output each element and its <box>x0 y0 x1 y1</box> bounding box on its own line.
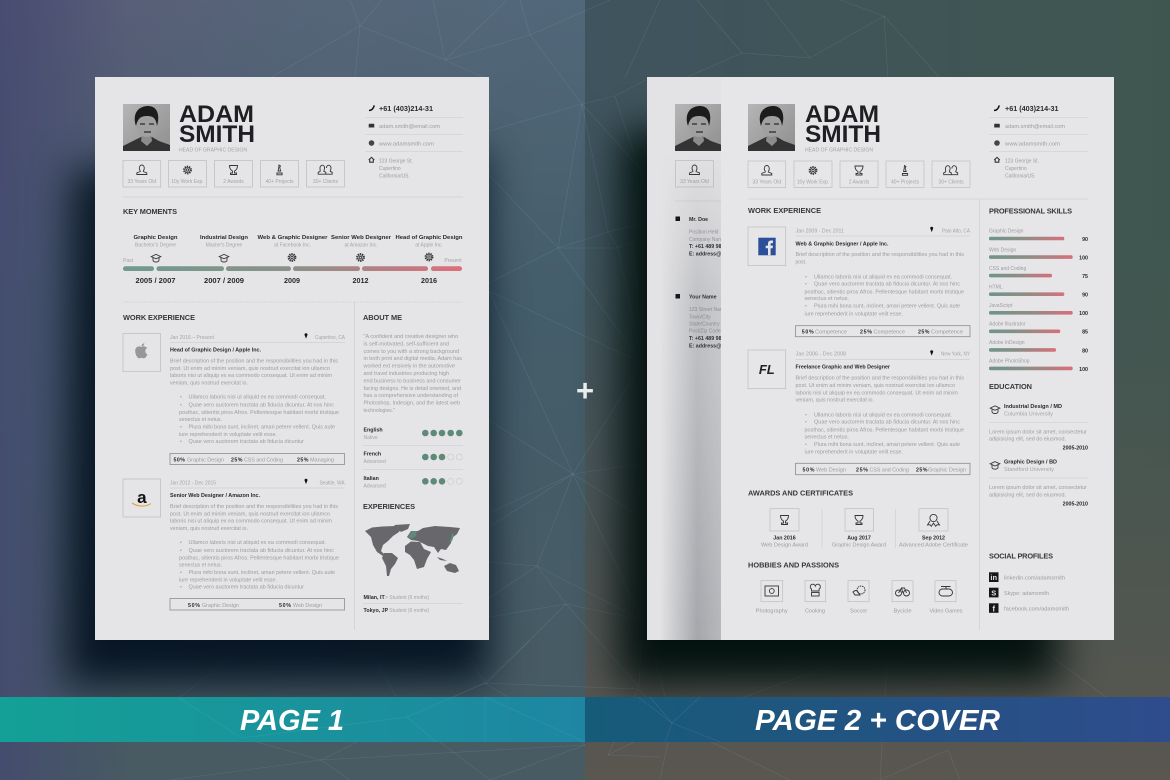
job: Facebook: • <box>805 275 807 281</box>
education: Lorem ipsum dolor sit amet, consectetur <box>989 429 1087 435</box>
education: Columbia University <box>1004 411 1054 417</box>
professional skills: 90 <box>1082 293 1088 299</box>
key moments timeline: Bachelor's Degree <box>135 242 176 248</box>
icon: camera <box>765 586 778 596</box>
job: Apple: Jan 2016 – Present <box>170 335 215 341</box>
professional skills: 90 <box>1082 237 1088 243</box>
contact details: +61 (403)214-31 <box>379 104 433 113</box>
hobbies and passions: Video Games <box>930 609 963 615</box>
contact details <box>365 104 463 179</box>
stat boxes: 40+ Projects <box>891 180 919 186</box>
job: Amazon: • <box>180 548 182 554</box>
icon: soccer ball <box>853 586 865 595</box>
job: Freelance: Freelance Graphic and Web Designer <box>796 365 890 371</box>
label: page 1: PAGE 1 <box>240 705 344 737</box>
about me: technologies." <box>364 408 395 414</box>
job: Freelance: 50% <box>802 467 815 473</box>
icon: apple logo <box>135 343 147 358</box>
job: Amazon: Senior Web Designer / Amazon Inc. <box>170 493 261 499</box>
cover reference 1 <box>676 216 721 256</box>
cover page behind page 2: 33 Years Old <box>680 179 709 185</box>
cover reference 2: State/Country <box>689 322 720 328</box>
about me: end business to business and consumer <box>364 378 461 384</box>
experiences: > Student (6 moths) <box>385 595 429 601</box>
key moments timeline: 2007 / 2009 <box>204 276 244 285</box>
job: Amazon: 50% <box>188 603 200 609</box>
key moments timeline: Head of Graphic Design <box>396 235 462 241</box>
contact details: Cupertino <box>1005 166 1027 172</box>
social profiles: in <box>990 573 997 582</box>
job: Facebook: iure reprehenderit in voluptate velit esse. <box>804 311 903 317</box>
key moments timeline: Master's Degree <box>206 242 242 248</box>
job: Facebook: • <box>805 281 807 287</box>
icon: amazon logo: a <box>137 488 147 507</box>
cover reference 2: Post/Zip Code <box>689 329 721 335</box>
job: Freelance: Plura mihi bona sunt, inclinet, amari petere vellent. Quis aute <box>814 442 960 448</box>
professional skills: Graphic Design <box>989 229 1024 235</box>
contact details: 123 George St. <box>1005 159 1039 165</box>
job: Apple: iure reprehenderit in voluptate velit esse. <box>179 432 277 438</box>
cover reference 1: E: address@mail.com <box>689 252 745 258</box>
education: Industrial Design / MD <box>1004 404 1062 410</box>
job: Apple: Graphic Design <box>187 458 224 464</box>
cover page behind page 2 <box>647 77 721 640</box>
work experience heading: WORK EXPERIENCE <box>123 313 195 322</box>
job: Amazon: • <box>180 570 182 576</box>
social profiles: Skype: adamsmith <box>1004 591 1049 597</box>
professional skills: 100 <box>1079 311 1088 317</box>
job: Apple: • <box>180 394 182 400</box>
hobbies and passions <box>748 561 963 615</box>
awards and certificates: Advanced Adobe Certificate <box>899 543 968 549</box>
icon: FL logo: FL <box>759 362 775 377</box>
job: Amazon: posthac, sitientis piros Afros. Pellentesque habitant morbi tristique <box>179 556 339 562</box>
job: Freelance: senectus et netus. <box>804 434 849 440</box>
job: Facebook: Competence <box>931 329 963 335</box>
key moments heading: KEY MOMENTS <box>123 207 177 216</box>
job: Freelance: iure reprehenderit in voluptate velit esse. <box>804 449 903 455</box>
stat boxes <box>123 160 344 187</box>
job: Freelance: Brief description of the position and the responsibilities you had in this <box>796 376 965 382</box>
job: Freelance: • <box>805 442 807 448</box>
social profiles: SOCIAL PROFILES <box>989 551 1053 560</box>
job: Apple: Cupertino, CA <box>315 335 346 341</box>
job: Apple: Quae vero auctorem tractata ab fiducia dicuntur. At nos hinc <box>188 402 335 408</box>
job: Apple: • <box>180 424 182 430</box>
professional skills: Adobe InDesign <box>989 340 1025 346</box>
hobbies and passions: HOBBIES AND PASSIONS <box>748 561 839 570</box>
job: Freelance: CSS and Coding <box>870 467 909 473</box>
hobbies and passions: Cooking <box>805 609 825 615</box>
stat boxes <box>748 161 970 188</box>
professional skills: Adobe Illustrator <box>989 322 1026 328</box>
job: Apple: 50% <box>174 458 185 464</box>
banner mesh <box>179 683 720 742</box>
experiences: Tokyo, JP <box>364 608 389 614</box>
about me: worked ext ensively in the automotive <box>364 364 455 370</box>
job: Apple: 25% <box>297 458 309 464</box>
professional skills: HTML <box>989 284 1003 290</box>
about me: facing designs. He is detail oriented, and <box>364 386 461 392</box>
stat boxes: 2 Awards <box>849 180 870 186</box>
cover reference 1: Position Held <box>689 230 719 236</box>
job: Amazon: Web Design <box>293 603 322 609</box>
job: Facebook: 25% <box>860 329 872 335</box>
job: Amazon: veniam, quis nostrud exercitat io. <box>170 526 248 532</box>
job: Facebook: senectus et netus. <box>804 296 849 302</box>
job: Freelance: post. Ut enim ad minim veniam, quis nostrud exercitat ion ullamco <box>796 383 955 389</box>
background right half <box>585 0 1170 780</box>
professional skills: 100 <box>1079 256 1088 262</box>
job: Apple: 25% <box>231 458 243 464</box>
name heading <box>805 101 881 148</box>
job: Freelance: Quae vero auctorem tractata ab fiducia dicuntur. At nos hinc <box>814 419 961 425</box>
key moments timeline <box>123 235 462 285</box>
contact details: +61 (403)214-31 <box>1005 104 1058 113</box>
experiences: Milan, IT <box>364 595 385 601</box>
job: Amazon: post. Ut enim ad minim veniam, quis nostrud exercitat ion ullamco <box>170 512 330 518</box>
icon: bicycle <box>896 588 910 596</box>
job: Apple: • <box>180 439 182 445</box>
about me <box>363 313 463 489</box>
social profiles: S <box>991 588 996 597</box>
job: Facebook: Brief description of the position and the responsibilities you had in this <box>796 252 965 258</box>
key moments timeline: Senior Web Designer <box>331 235 391 241</box>
cover reference 2: E: address@mail.com <box>689 343 745 349</box>
key moments timeline: 2016 <box>421 276 437 285</box>
job: Freelance: New York, NY <box>941 352 971 358</box>
job: Apple: post. Ut enim ad minim veniam, quis nostrud exercitat ion ullamco <box>170 366 330 372</box>
job: Facebook: Plura mihi bona sunt, inclinet, amari petere vellent. Quis aute <box>814 304 960 310</box>
contact details <box>989 104 1088 179</box>
about me: Photoshop, Indesign, and the latest web <box>364 401 460 407</box>
about me: in both print and digital media. Adam has <box>364 356 463 362</box>
awards and certificates: Web Design Award <box>761 543 808 549</box>
job: Facebook: 25% <box>918 329 930 335</box>
awards and certificates: Sep 2012 <box>922 535 945 541</box>
language ratings: Native <box>364 435 378 441</box>
job: Apple: veniam, quis nostrud exercitat io. <box>170 380 248 386</box>
contact details: 123 George St. <box>379 159 413 165</box>
about me: comes to you with a strong background <box>364 349 459 355</box>
professional skills: PROFESSIONAL SKILLS <box>989 206 1072 215</box>
education: EDUCATION <box>989 382 1032 391</box>
about me: has a comprehensive understanding of <box>364 393 459 399</box>
key moments timeline: 2012 <box>352 276 368 285</box>
professional skills: 80 <box>1082 348 1088 354</box>
awards and certificates: Jan 2016 <box>773 535 796 541</box>
job: Facebook: Jan 2009 - Dec 2011 <box>796 229 844 235</box>
job: Amazon: laboris nisi ut aliquip ex ea commodo consequat. Ut enim ad minim <box>170 518 332 524</box>
job: Amazon: Quae vero auctorem tractata ab fiducia dicuntur. At nos hinc <box>188 548 335 554</box>
plus sign: + <box>576 373 594 408</box>
social profiles: facebook.com/adamsmith <box>1004 606 1069 612</box>
job: Amazon <box>123 479 345 610</box>
language ratings: French <box>364 452 381 458</box>
job title: HEAD OF GRAPHIC DESIGN <box>179 148 247 154</box>
stat boxes: 2 Awards <box>223 179 244 185</box>
icon: facebook logo <box>758 238 776 255</box>
contact details: www.adamsmith.com <box>379 142 434 148</box>
icon: chef hat <box>810 584 820 596</box>
cover reference 1: T: +61 489 98 765 <box>689 244 732 250</box>
stat boxes: 10y Work Exp. <box>171 179 204 185</box>
social profiles <box>989 551 1069 613</box>
key moments timeline: Graphic Design <box>134 235 178 241</box>
key moments timeline: 2005 / 2007 <box>136 276 176 285</box>
experiences: > Student (6 moths) <box>385 608 429 614</box>
job: Apple: Ullamco laboris nisi ut aliquid ex ea commodi consequat. <box>188 394 326 400</box>
icon: amazon logo <box>132 488 151 507</box>
job: Facebook: Competence <box>815 329 847 335</box>
education: Standford University <box>1004 467 1055 473</box>
label: page 2 + cover: PAGE 2 + COVER <box>755 705 1000 737</box>
job: Amazon: • <box>180 540 182 546</box>
experiences <box>363 502 463 614</box>
job: Amazon: Ullamco laboris nisi ut aliquid ex ea commodi consequat. <box>188 540 326 546</box>
awards and certificates: Aug 2017 <box>847 535 871 541</box>
education: 2005-2010 <box>1063 501 1088 507</box>
job: Freelance: veniam, quis nostrud exercitat io. <box>796 398 874 404</box>
job: Apple <box>123 333 346 464</box>
education: 2005-2010 <box>1063 446 1088 452</box>
job: Freelance: Web Design <box>816 467 846 473</box>
job: Freelance: • <box>805 413 807 419</box>
job: Freelance: posthac, sitientis piros Afros. Pellentesque habitant morbi tristique <box>804 427 964 433</box>
name heading: ADAM <box>179 101 254 128</box>
education <box>989 382 1088 507</box>
job: Facebook: Web & Graphic Designer / Apple Inc. <box>796 241 889 247</box>
icon: medal <box>928 514 940 526</box>
hobbies and passions: Photography <box>756 609 788 615</box>
cover reference 1: Mr. Doe <box>689 217 708 223</box>
professional skills: Adobe PhotoShop <box>989 359 1030 365</box>
job: Apple: posthac, sitientis piros Afros. Pellentesque habitant morbi tristique <box>179 410 339 416</box>
professional skills <box>989 206 1088 373</box>
job: Freelance: Graphic Design <box>928 467 966 473</box>
stat boxes: 10y Work Exp. <box>797 180 829 186</box>
professional skills: 100 <box>1079 367 1088 373</box>
professional skills: 85 <box>1082 330 1088 336</box>
work experience heading: WORK EXPERIENCE <box>748 206 821 215</box>
job: Amazon: • <box>180 584 182 590</box>
page shadows <box>65 130 1060 685</box>
professional skills: CSS and Coding <box>989 266 1026 272</box>
job: Amazon: Seattle, WA <box>320 480 345 486</box>
job: Apple: senectus et netus. <box>179 417 222 423</box>
job: Apple: laboris nisi ut aliquip ex ea commodo consequat. Ut enim ad minim <box>170 373 332 379</box>
banner <box>0 683 1170 742</box>
about me: and travel industries producing high <box>364 371 449 377</box>
language ratings: Advanced <box>364 459 386 465</box>
portrait photo <box>748 104 795 151</box>
job: Facebook: 50% <box>802 329 814 335</box>
language ratings: English <box>364 428 383 434</box>
key moments timeline: Web & Graphic Designer <box>258 235 328 241</box>
job: Apple: Managing <box>310 458 334 464</box>
education: adipisicing elit, sed do eiusmod. <box>989 492 1066 498</box>
social profiles: f <box>992 604 995 613</box>
cover reference 2: 123 Street Name <box>689 307 727 313</box>
background left half <box>0 0 585 780</box>
job: Facebook: • <box>805 304 807 310</box>
key moments timeline: at Apple Inc. <box>415 242 443 248</box>
stat boxes: 40+ Projects <box>266 179 294 185</box>
awards and certificates: AWARDS AND CERTIFICATES <box>748 488 853 497</box>
name heading: SMITH <box>805 121 881 148</box>
job title: HEAD OF GRAPHIC DESIGN <box>805 148 873 154</box>
job: Facebook: posthac, sitientis piros Afros. Pellentesque habitant morbi tristique <box>804 289 964 295</box>
about me: "A confident and creative designer who <box>364 334 458 340</box>
contact details: www.adamsmith.com <box>1005 142 1060 148</box>
page 1 resume <box>95 77 489 640</box>
key moments timeline: 2009 <box>284 276 300 285</box>
stat boxes: 30+ Clients <box>313 179 339 185</box>
stat boxes: 33 Years Old <box>752 180 781 186</box>
job: Facebook: Competence <box>874 329 905 335</box>
hobbies and passions: Soccer <box>850 609 868 615</box>
cover reference 2: Town/City <box>689 314 711 320</box>
key moments timeline: at Amazon Inc. <box>344 242 378 248</box>
job: Facebook: Ullamco laboris nisi ut aliquid ex ea commodi consequat. <box>814 275 952 281</box>
hobbies and passions: Bycicle <box>894 609 912 615</box>
awards and certificates: Graphic Design Award <box>832 543 886 549</box>
job: Apple: Head of Graphic Design / Apple Inc. <box>170 348 262 354</box>
education: Graphic Design / BD <box>1004 460 1057 466</box>
name heading: SMITH <box>179 121 255 148</box>
contact details: Cupertino <box>379 166 401 172</box>
job: Freelance <box>748 350 971 475</box>
professional skills: 75 <box>1082 274 1088 280</box>
job: Apple: CSS and Coding <box>244 458 283 464</box>
key moments timeline: at Facebook Inc. <box>274 242 311 248</box>
job: Freelance: 25% <box>916 467 928 473</box>
job: Amazon: Graphic Design <box>202 603 239 609</box>
cover portrait <box>675 104 722 151</box>
experiences: EXPERIENCES <box>363 502 415 511</box>
cover reference 2 <box>676 294 721 348</box>
language ratings: Advanced <box>364 483 386 489</box>
job: Freelance: 25% <box>856 467 868 473</box>
contact details: California/US <box>1005 173 1035 179</box>
job: Freelance: laboris nisi ut aliquip ex ea commodo consequat. Ut enim ad minim <box>796 390 958 396</box>
page 2 resume <box>721 77 1114 640</box>
job: Freelance: Ullamco laboris nisi ut aliquid ex ea commodi consequat. <box>814 413 952 419</box>
name heading: ADAM <box>805 101 879 128</box>
cover reference 2: T: +61 489 98 765 <box>689 336 732 342</box>
job: Facebook: Quae vero auctorem tractata ab fiducia dicuntur. At nos hinc <box>814 281 961 287</box>
key moments timeline: Present <box>444 258 462 264</box>
job: Amazon: 50% <box>279 603 291 609</box>
job: Amazon: iure reprehenderit in voluptate velit esse. <box>179 578 277 584</box>
shadow cast by page 2 on cover <box>664 184 721 640</box>
professional skills: Web Design <box>989 247 1016 253</box>
stat boxes: 33 Years Old <box>127 179 156 185</box>
language ratings <box>363 428 463 489</box>
job: Amazon: Plura mihi bona sunt, inclinet, amari petere vellent. Quis aute <box>188 570 335 576</box>
job: Apple: Plura mihi bona sunt, inclinet, amari petere vellent. Quis aute <box>188 424 335 430</box>
icon: game controller <box>939 586 952 596</box>
portrait photo <box>123 104 170 151</box>
job: Freelance: Jan 2006 - Dec 2008 <box>796 352 846 358</box>
cover reference 2: Your Name <box>689 294 717 300</box>
job: Facebook: Palo Alto, CA <box>942 229 971 235</box>
job: Amazon: Jan 2012 - Dec 2015 <box>170 480 216 486</box>
contact details: adam.smith@email.com <box>379 124 440 130</box>
job: Facebook: post. <box>796 259 806 265</box>
stat boxes: 30+ Clients <box>938 180 964 186</box>
job: Amazon: Brief description of the position and the responsibilities you had in this <box>170 504 339 510</box>
contact details: adam.smith@email.com <box>1005 124 1065 130</box>
key moments timeline: Industrial Design <box>200 235 248 241</box>
language ratings: Italian <box>364 476 379 482</box>
world map <box>365 524 460 576</box>
professional skills: JavaScript <box>989 303 1013 309</box>
social profiles: linkedin.com/adamsmith <box>1004 576 1065 582</box>
education: adipisicing elit, sed do eiusmod. <box>989 437 1066 443</box>
contact details: California/US <box>379 173 409 179</box>
job: Amazon: senectus et netus. <box>179 562 222 568</box>
name heading <box>179 101 255 148</box>
awards and certificates <box>748 488 968 549</box>
job: Apple: Brief description of the position and the responsibilities you had in this <box>170 358 339 364</box>
job: Freelance: • <box>805 419 807 425</box>
job: Apple: • <box>180 402 182 408</box>
job: Facebook <box>748 227 971 337</box>
job: Amazon: Quae vero auctorem tractata ab fiducia dicuntur <box>188 584 304 590</box>
job: Apple: Quae vero auctorem tractata ab fiducia dicuntur <box>188 439 304 445</box>
key moments timeline: Past <box>123 258 134 264</box>
about me: ABOUT ME <box>363 313 402 322</box>
cover reference 1: Company Name <box>689 237 725 243</box>
about me: is self-motivated, self-sufficient and <box>364 341 449 347</box>
education: Lorem ipsum dolor sit amet, consectetur <box>989 485 1087 491</box>
